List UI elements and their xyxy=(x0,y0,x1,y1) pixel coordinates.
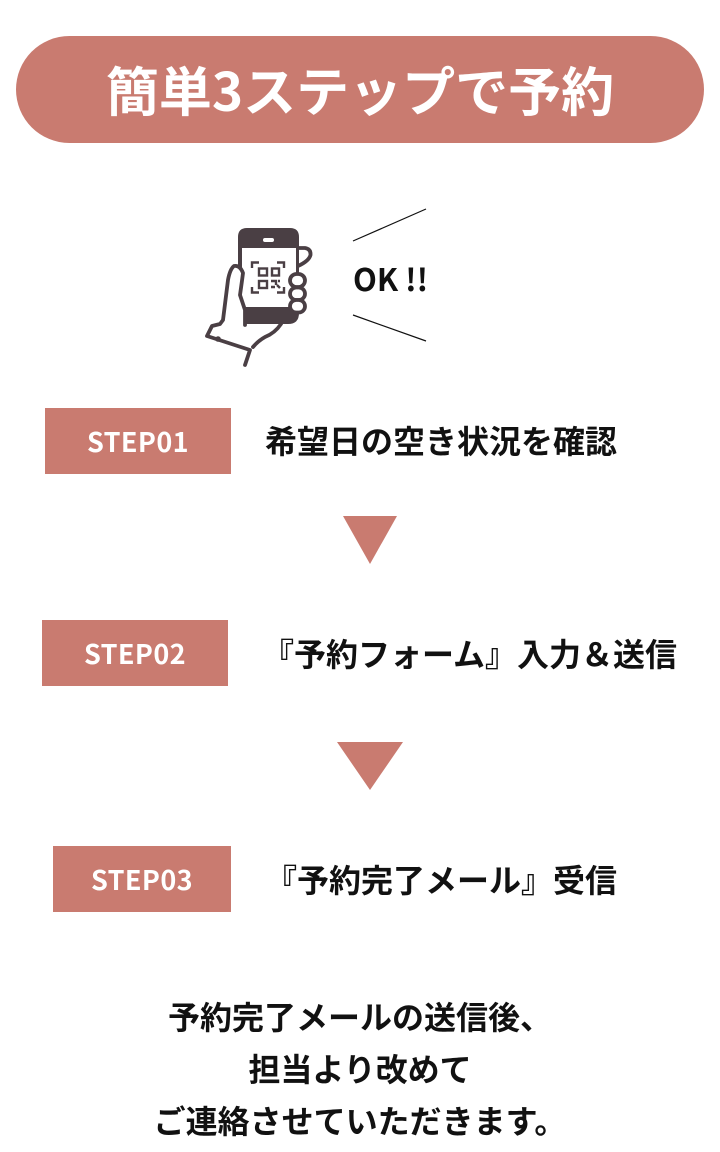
step 3 badge: STEP03 xyxy=(91,859,193,898)
step 3 badge xyxy=(53,846,231,912)
title text: 簡単3ステップで予約 xyxy=(106,51,614,127)
closing message: ご連絡させていただきます。 xyxy=(154,1097,566,1143)
step 2 badge: STEP02 xyxy=(84,633,186,672)
step 2 badge xyxy=(42,620,228,686)
title banner xyxy=(16,36,704,143)
step 1 badge: STEP01 xyxy=(87,421,189,460)
step 3 text: 『予約完了メール』受信 xyxy=(265,856,617,902)
closing message xyxy=(154,993,566,1143)
step 2 text: 『予約フォーム』入力＆送信 xyxy=(262,630,677,676)
icon: hand holding phone with QR code xyxy=(205,228,312,367)
speech lines xyxy=(352,208,426,342)
arrow down 1 xyxy=(343,516,397,564)
arrow down 2 xyxy=(337,742,403,790)
closing message: 予約完了メールの送信後、 xyxy=(168,993,552,1039)
OK text: OK !! xyxy=(353,255,428,300)
step 1 badge xyxy=(45,408,231,474)
closing message: 担当より改めて xyxy=(248,1045,472,1091)
step 1 text: 希望日の空き状況を確認 xyxy=(265,417,617,463)
